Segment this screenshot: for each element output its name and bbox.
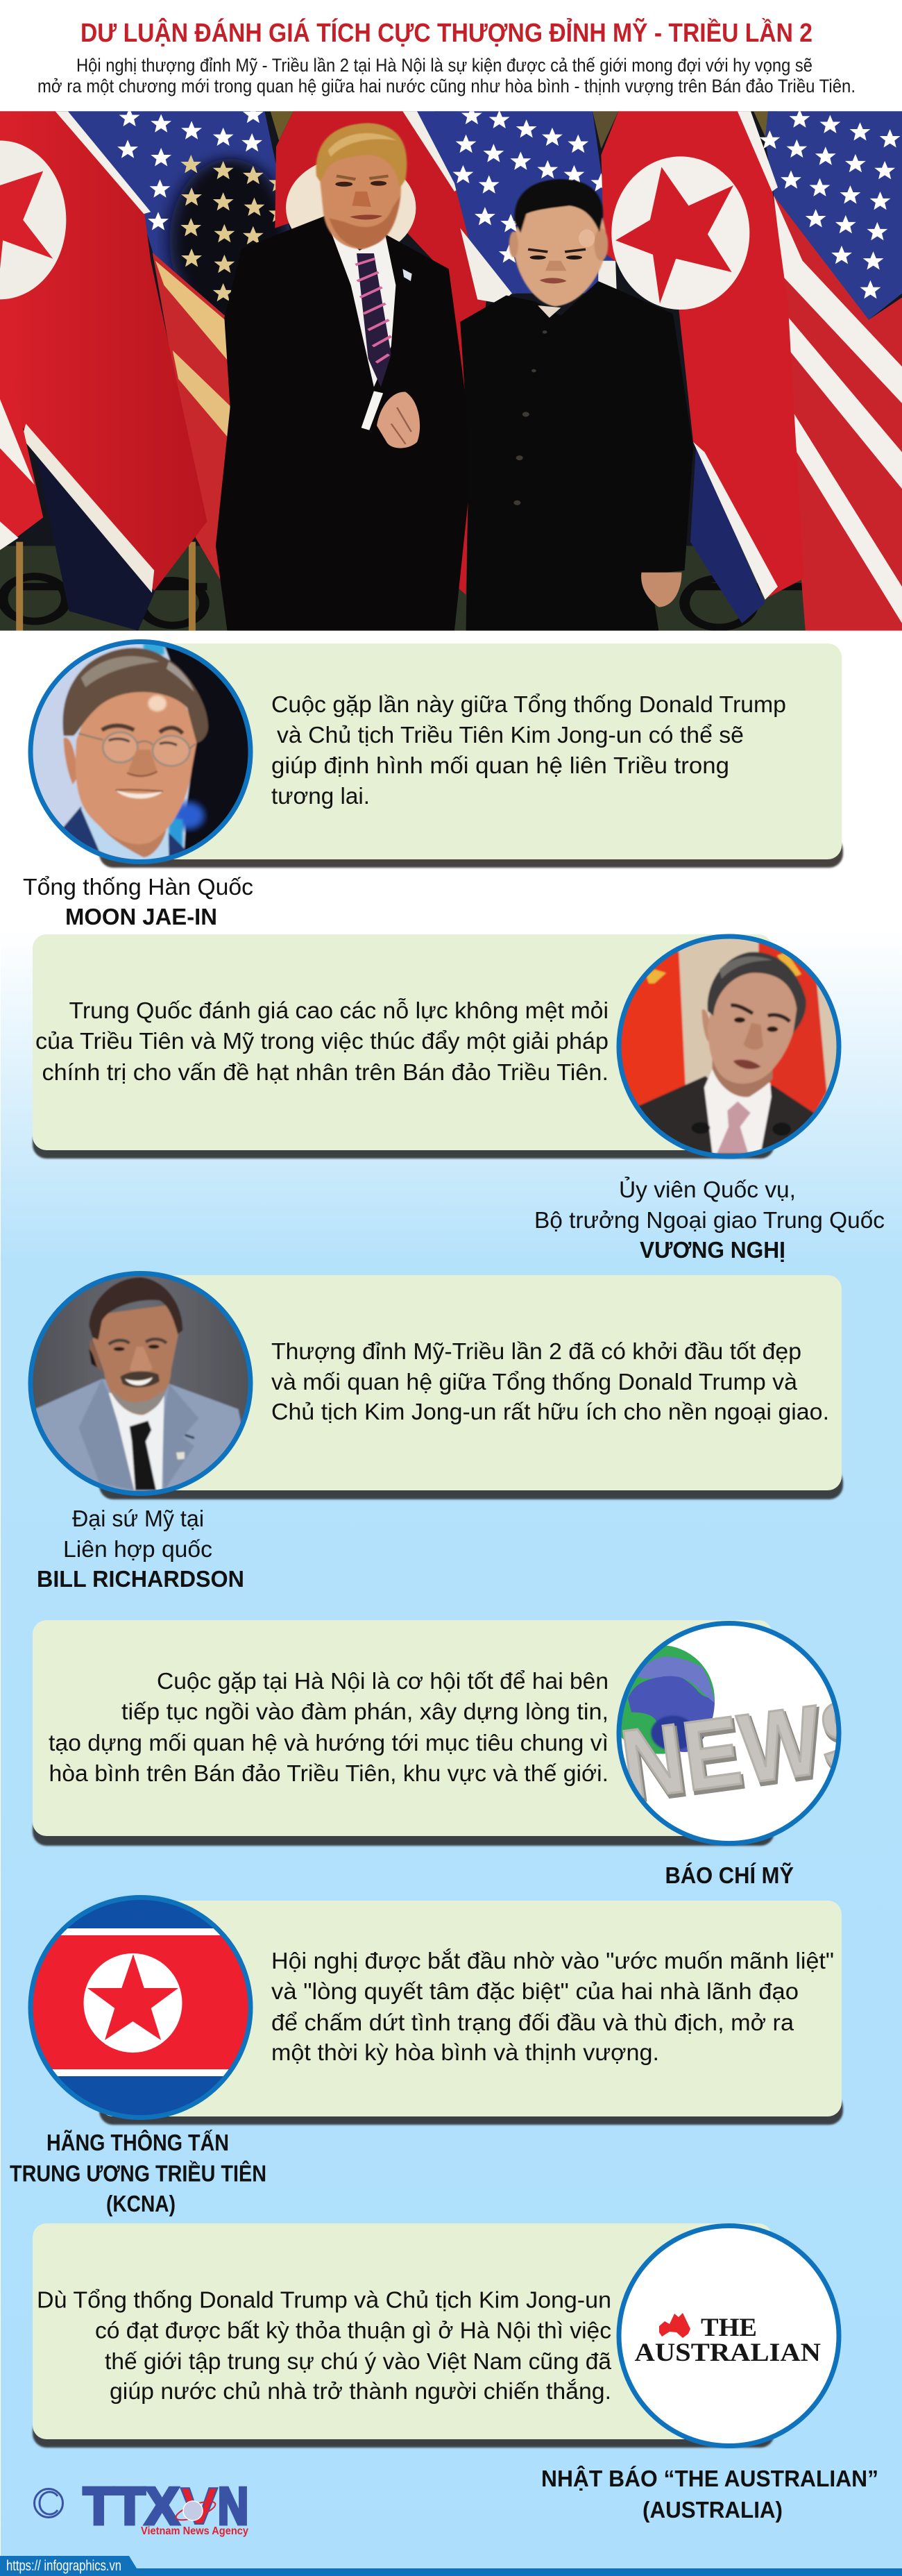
portrait: Wang Yi (611, 930, 846, 1166)
panel: Moon Jae-in (21, 639, 843, 929)
quote box (99, 1901, 842, 2116)
panel shadow (33, 2416, 774, 2448)
speaker label (10, 2129, 266, 2216)
speaker label: Ủy viên Quốc vụ, (619, 1177, 796, 1202)
flag: US left (58, 105, 291, 587)
speaker label (23, 874, 253, 929)
quote text: để chấm dứt tình trạng đối đầu và thù địch, mở ra (271, 2010, 794, 2035)
speaker label (37, 1506, 244, 1592)
quote text: hòa bình trên Bán đảo Triều Tiên, khu vực và thế giới. (49, 1760, 609, 1786)
panel: US press (33, 1610, 886, 1888)
flag: North Korea centre (275, 111, 486, 595)
portrait ring (619, 1623, 839, 1844)
quote text: một thời kỳ hòa bình và thịnh vượng. (271, 2039, 659, 2065)
quote text: Cuộc gặp tại Hà Nội là cơ hội tốt để hai bên (157, 1668, 609, 1694)
panel shadow (99, 836, 843, 868)
logo: TTXVN: TTX (83, 2477, 179, 2535)
quote box (33, 1620, 772, 1836)
quote text: và mối quan hệ giữa Tổng thống Donald Trump và (271, 1369, 798, 1395)
quote text (37, 2287, 612, 2404)
image: NEWS globe (606, 1610, 886, 1846)
logo: The Australian: THE (701, 2314, 757, 2342)
panel shadow (33, 1815, 774, 1846)
quote text: Cuộc gặp lần này giữa Tổng thống Donald Trump (271, 691, 786, 717)
panel shadow (99, 1468, 843, 1499)
quote text: có đạt được bất kỳ thỏa thuận gì ở Hà Nội thì việc (95, 2317, 611, 2343)
quote text: của Triều Tiên và Mỹ trong việc thúc đẩy một giải pháp (35, 1028, 609, 1054)
photo: handshake in front of flags (0, 105, 902, 631)
quote text (49, 1668, 609, 1786)
logo: TTXVN: Vietnam News Agency (141, 2525, 248, 2537)
logo: The Australian (619, 2225, 839, 2446)
speaker label: Tổng thống Hàn Quốc (23, 874, 253, 900)
speaker label: Liên hợp quốc (63, 1536, 212, 1562)
portrait ring (31, 1898, 250, 2117)
speaker label (534, 1177, 885, 1263)
flag: North Korea left (0, 111, 207, 631)
speaker label: (KCNA) (106, 2191, 176, 2216)
quote text: Chủ tịch Kim Jong-un rất hữu ích cho nền ngoại giao. (271, 1399, 829, 1424)
panel shadow (99, 2094, 843, 2125)
speaker label: NHẬT BÁO “THE AUSTRALIAN” (541, 2466, 878, 2491)
icon: globe (606, 1645, 715, 1754)
portrait ring (619, 936, 839, 1156)
speaker label: VƯƠNG NGHỊ (640, 1237, 785, 1263)
portrait ring (31, 641, 250, 862)
footer bar: https:// infographics.vn (6, 2558, 121, 2574)
speaker label: MOON JAE-IN (65, 904, 217, 929)
quote box (33, 934, 772, 1150)
title: DƯ LUẬN ĐÁNH GIÁ TÍCH CỰC THƯỢNG ĐỈNH MỸ - TRIỀU LẦN 2 (80, 17, 812, 48)
panel: Wang Yi (33, 930, 885, 1263)
speaker label: Bộ trưởng Ngoại giao Trung Quốc (534, 1207, 885, 1233)
quote text: Thượng đỉnh Mỹ-Triều lần 2 đã có khởi đầu tốt đẹp (271, 1338, 801, 1364)
quote text: giúp định hình mối quan hệ liên Triều trong (271, 752, 729, 778)
speaker label: Đại sứ Mỹ tại (72, 1506, 204, 1531)
speaker label: (AUSTRALIA) (643, 2497, 783, 2523)
panel: KCNA (10, 1895, 843, 2216)
quote box (99, 1275, 842, 1490)
flag: US right (759, 109, 902, 631)
panel: The Australian (33, 2223, 878, 2523)
logo: TTXVN: N (218, 2477, 248, 2535)
quote text: tạo dựng mối quan hệ và hướng tới mục tiêu chung vì (49, 1730, 609, 1756)
quote text: tiếp tục ngồi vào đàm phán, xây dựng lòng tin, (121, 1699, 609, 1724)
quote text: giúp nước chủ nhà trở thành người chiến thắng. (110, 2378, 611, 2404)
quote text: Hội nghị được bắt đầu nhờ vào "ước muốn mãnh liệt" (271, 1948, 834, 1973)
portrait: Moon Jae-in (21, 639, 257, 875)
quote text: và Chủ tịch Triều Tiên Kim Jong-un có thể sẽ (277, 722, 744, 748)
quote box (99, 643, 842, 859)
speaker label: BÁO CHÍ MỸ (665, 1862, 794, 1888)
speaker label: HÃNG THÔNG TẤN (46, 2129, 229, 2155)
icon: North Korea flag (28, 1895, 257, 2121)
person: Donald Trump (216, 123, 473, 631)
portrait ring (619, 2225, 839, 2446)
portrait: Bill Richardson (21, 1270, 257, 1506)
quote text: Dù Tổng thống Donald Trump và Chủ tịch Kim Jong-un (37, 2287, 611, 2313)
intro text (37, 55, 856, 96)
logo: The Australian: AUSTRALIAN (634, 2339, 821, 2367)
copyright symbol (35, 2489, 62, 2517)
speaker label: BILL RICHARDSON (37, 1566, 244, 1592)
logo: TTXVN (83, 2477, 248, 2537)
speaker label (541, 2466, 878, 2523)
quote text: Trung Quốc đánh giá cao các nỗ lực không mệt mỏi (69, 997, 609, 1023)
person: Kim Jong-un (460, 179, 693, 631)
quote text: và "lòng quyết tâm đặc biệt" của hai nhà lãnh đạo (271, 1978, 799, 2004)
logo: TTXVN: V (180, 2477, 218, 2535)
flag: US centre (417, 106, 617, 303)
footer bar (0, 2556, 902, 2576)
quote text (271, 1948, 834, 2065)
quote box (33, 2223, 772, 2439)
panel shadow (33, 1127, 774, 1159)
quote text: tương lai. (271, 783, 370, 809)
portrait ring (31, 1273, 250, 1494)
flag: North Korea right (601, 111, 803, 623)
quote text (271, 1338, 829, 1424)
intro text: Hội nghị thượng đỉnh Mỹ - Triều lần 2 tại Hà Nội là sự kiện được cả thế giới mong đợi với hy vọng sẽ (76, 55, 812, 76)
quote text: chính trị cho vấn đề hạt nhân trên Bán đảo Triều Tiên. (42, 1059, 609, 1085)
quote text (35, 997, 609, 1085)
panel: Bill Richardson (21, 1270, 843, 1592)
speaker label: TRUNG ƯƠNG TRIỀU TIÊN (10, 2160, 266, 2187)
quote text: thế giới tập trung sự chú ý vào Việt Nam cũng đã (105, 2348, 612, 2374)
quote text (271, 691, 786, 809)
